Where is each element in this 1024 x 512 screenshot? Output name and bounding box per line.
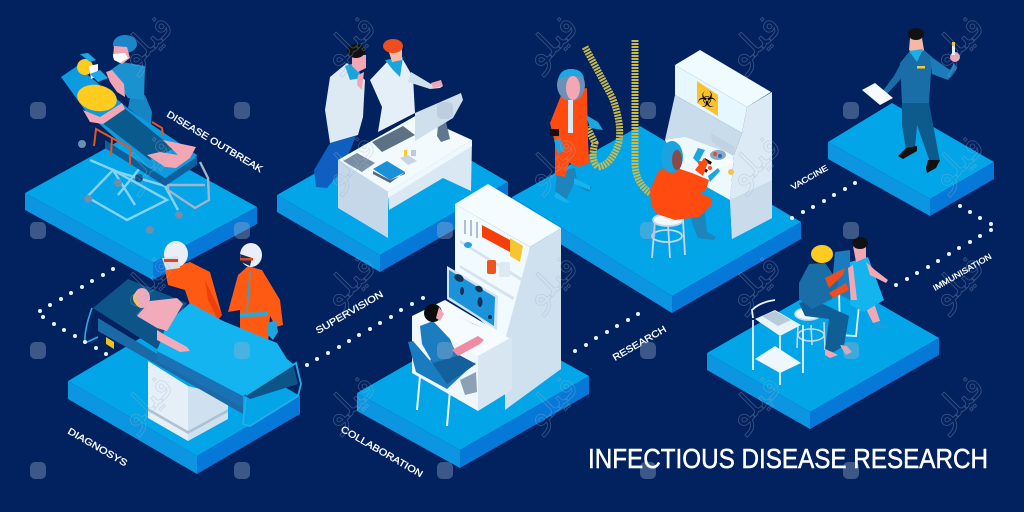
infographic canvas: فيلو bbox=[515, 126, 587, 198]
researcher at desk bbox=[420, 304, 484, 395]
label: disease outbreak: DISEASE OUTBREAK bbox=[164, 109, 265, 176]
label: vaccine: VACCINE bbox=[790, 163, 830, 192]
coiled air hoses bbox=[585, 40, 650, 193]
platform: collaboration bbox=[357, 319, 589, 468]
platform: research bbox=[512, 126, 801, 313]
researcher seated bbox=[650, 141, 720, 240]
patient on table bbox=[133, 288, 190, 352]
world map monitor bbox=[447, 266, 498, 330]
monitor bbox=[415, 93, 463, 142]
infographic canvas: فيلو bbox=[921, 366, 993, 438]
book bbox=[373, 161, 405, 183]
infographic canvas: فيلو bbox=[110, 246, 182, 318]
infographic canvas: فيلو bbox=[515, 366, 587, 438]
label: immunisation: IMMUNISATION bbox=[932, 252, 993, 293]
biohazard sign: ☣ bbox=[697, 88, 717, 113]
immunisation connector bbox=[894, 204, 993, 287]
infographic canvas: فيلو bbox=[921, 126, 993, 198]
panel: immunisation bbox=[707, 204, 993, 429]
label: research: RESEARCH bbox=[611, 324, 669, 364]
infographic canvas: فيلو bbox=[921, 246, 993, 318]
desk bbox=[338, 115, 472, 238]
supervision connector bbox=[305, 296, 425, 367]
infographic canvas: فيلو bbox=[921, 6, 993, 78]
shelf boxes and tubes bbox=[464, 220, 523, 277]
infographic canvas: فيلو bbox=[515, 246, 587, 318]
infographic canvas: فيلو bbox=[110, 126, 182, 198]
exam table base bbox=[148, 361, 228, 441]
panel: disease outbreak bbox=[25, 35, 265, 280]
desk bbox=[412, 300, 512, 411]
medical trolley bbox=[752, 300, 803, 385]
platform: vaccine bbox=[828, 103, 994, 216]
cabinet equipment bbox=[698, 133, 735, 175]
infographic canvas: فيلو bbox=[718, 6, 790, 78]
patient bbox=[75, 53, 196, 168]
gurney wheels bbox=[78, 140, 183, 234]
diagnosys connector bbox=[38, 267, 115, 356]
doctor man bbox=[314, 44, 366, 188]
infographic canvas: فيلو bbox=[313, 126, 385, 198]
panel: vaccine bbox=[790, 28, 994, 216]
desk items bbox=[400, 150, 417, 165]
lab shelving cabinet bbox=[455, 184, 561, 410]
infographic canvas: فيلو bbox=[718, 246, 790, 318]
researcher standing bbox=[550, 69, 603, 203]
infographic canvas: فيلو bbox=[110, 366, 182, 438]
chair bbox=[408, 341, 476, 426]
biosafety cabinet bbox=[665, 50, 772, 239]
stool bbox=[652, 214, 685, 258]
researcher orange left bbox=[162, 241, 222, 320]
stool bbox=[795, 308, 825, 350]
research connector bbox=[573, 312, 640, 353]
patient girl bbox=[832, 237, 890, 336]
gurney frame bbox=[87, 160, 209, 220]
keyboard bbox=[372, 126, 415, 152]
platform: diagnosys bbox=[68, 320, 300, 474]
exam table bbox=[85, 279, 298, 414]
stretcher bed bbox=[61, 66, 197, 186]
panel: research bbox=[512, 40, 801, 364]
panel: collaboration bbox=[338, 184, 589, 480]
label: collaboration: COLLABORATION bbox=[338, 424, 425, 480]
infographic canvas: فيلو bbox=[313, 246, 385, 318]
infographic canvas: فيلو bbox=[718, 366, 790, 438]
label: supervision: SUPERVISION bbox=[314, 289, 385, 337]
label: diagnosys: DIAGNOSYS bbox=[66, 426, 129, 469]
infographic canvas: فيلو bbox=[718, 126, 790, 198]
infographic canvas: فيلو bbox=[313, 366, 385, 438]
infographic canvas: فيلو bbox=[313, 6, 385, 78]
panel: supervision bbox=[277, 39, 508, 272]
platform: disease outbreak bbox=[25, 136, 257, 280]
infographic canvas: فيلو bbox=[110, 6, 182, 78]
vaccine connector bbox=[801, 181, 857, 214]
orange safety rails bbox=[94, 122, 163, 166]
doctor woman bbox=[370, 39, 443, 132]
nurse bbox=[106, 35, 152, 125]
clipboard bbox=[862, 83, 893, 105]
biohazard sign bbox=[697, 81, 718, 116]
nurse bbox=[799, 245, 852, 358]
researcher orange right bbox=[228, 243, 283, 343]
table rail bbox=[243, 363, 301, 426]
panel: diagnosys bbox=[38, 241, 301, 474]
blanket bbox=[157, 303, 293, 396]
vaccine scientist bbox=[882, 28, 960, 173]
tablet bbox=[343, 153, 375, 172]
connector dot bbox=[790, 216, 794, 220]
platform: supervision bbox=[277, 122, 508, 272]
infographic canvas: فيلو bbox=[515, 6, 587, 78]
platform: immunisation bbox=[707, 279, 939, 429]
